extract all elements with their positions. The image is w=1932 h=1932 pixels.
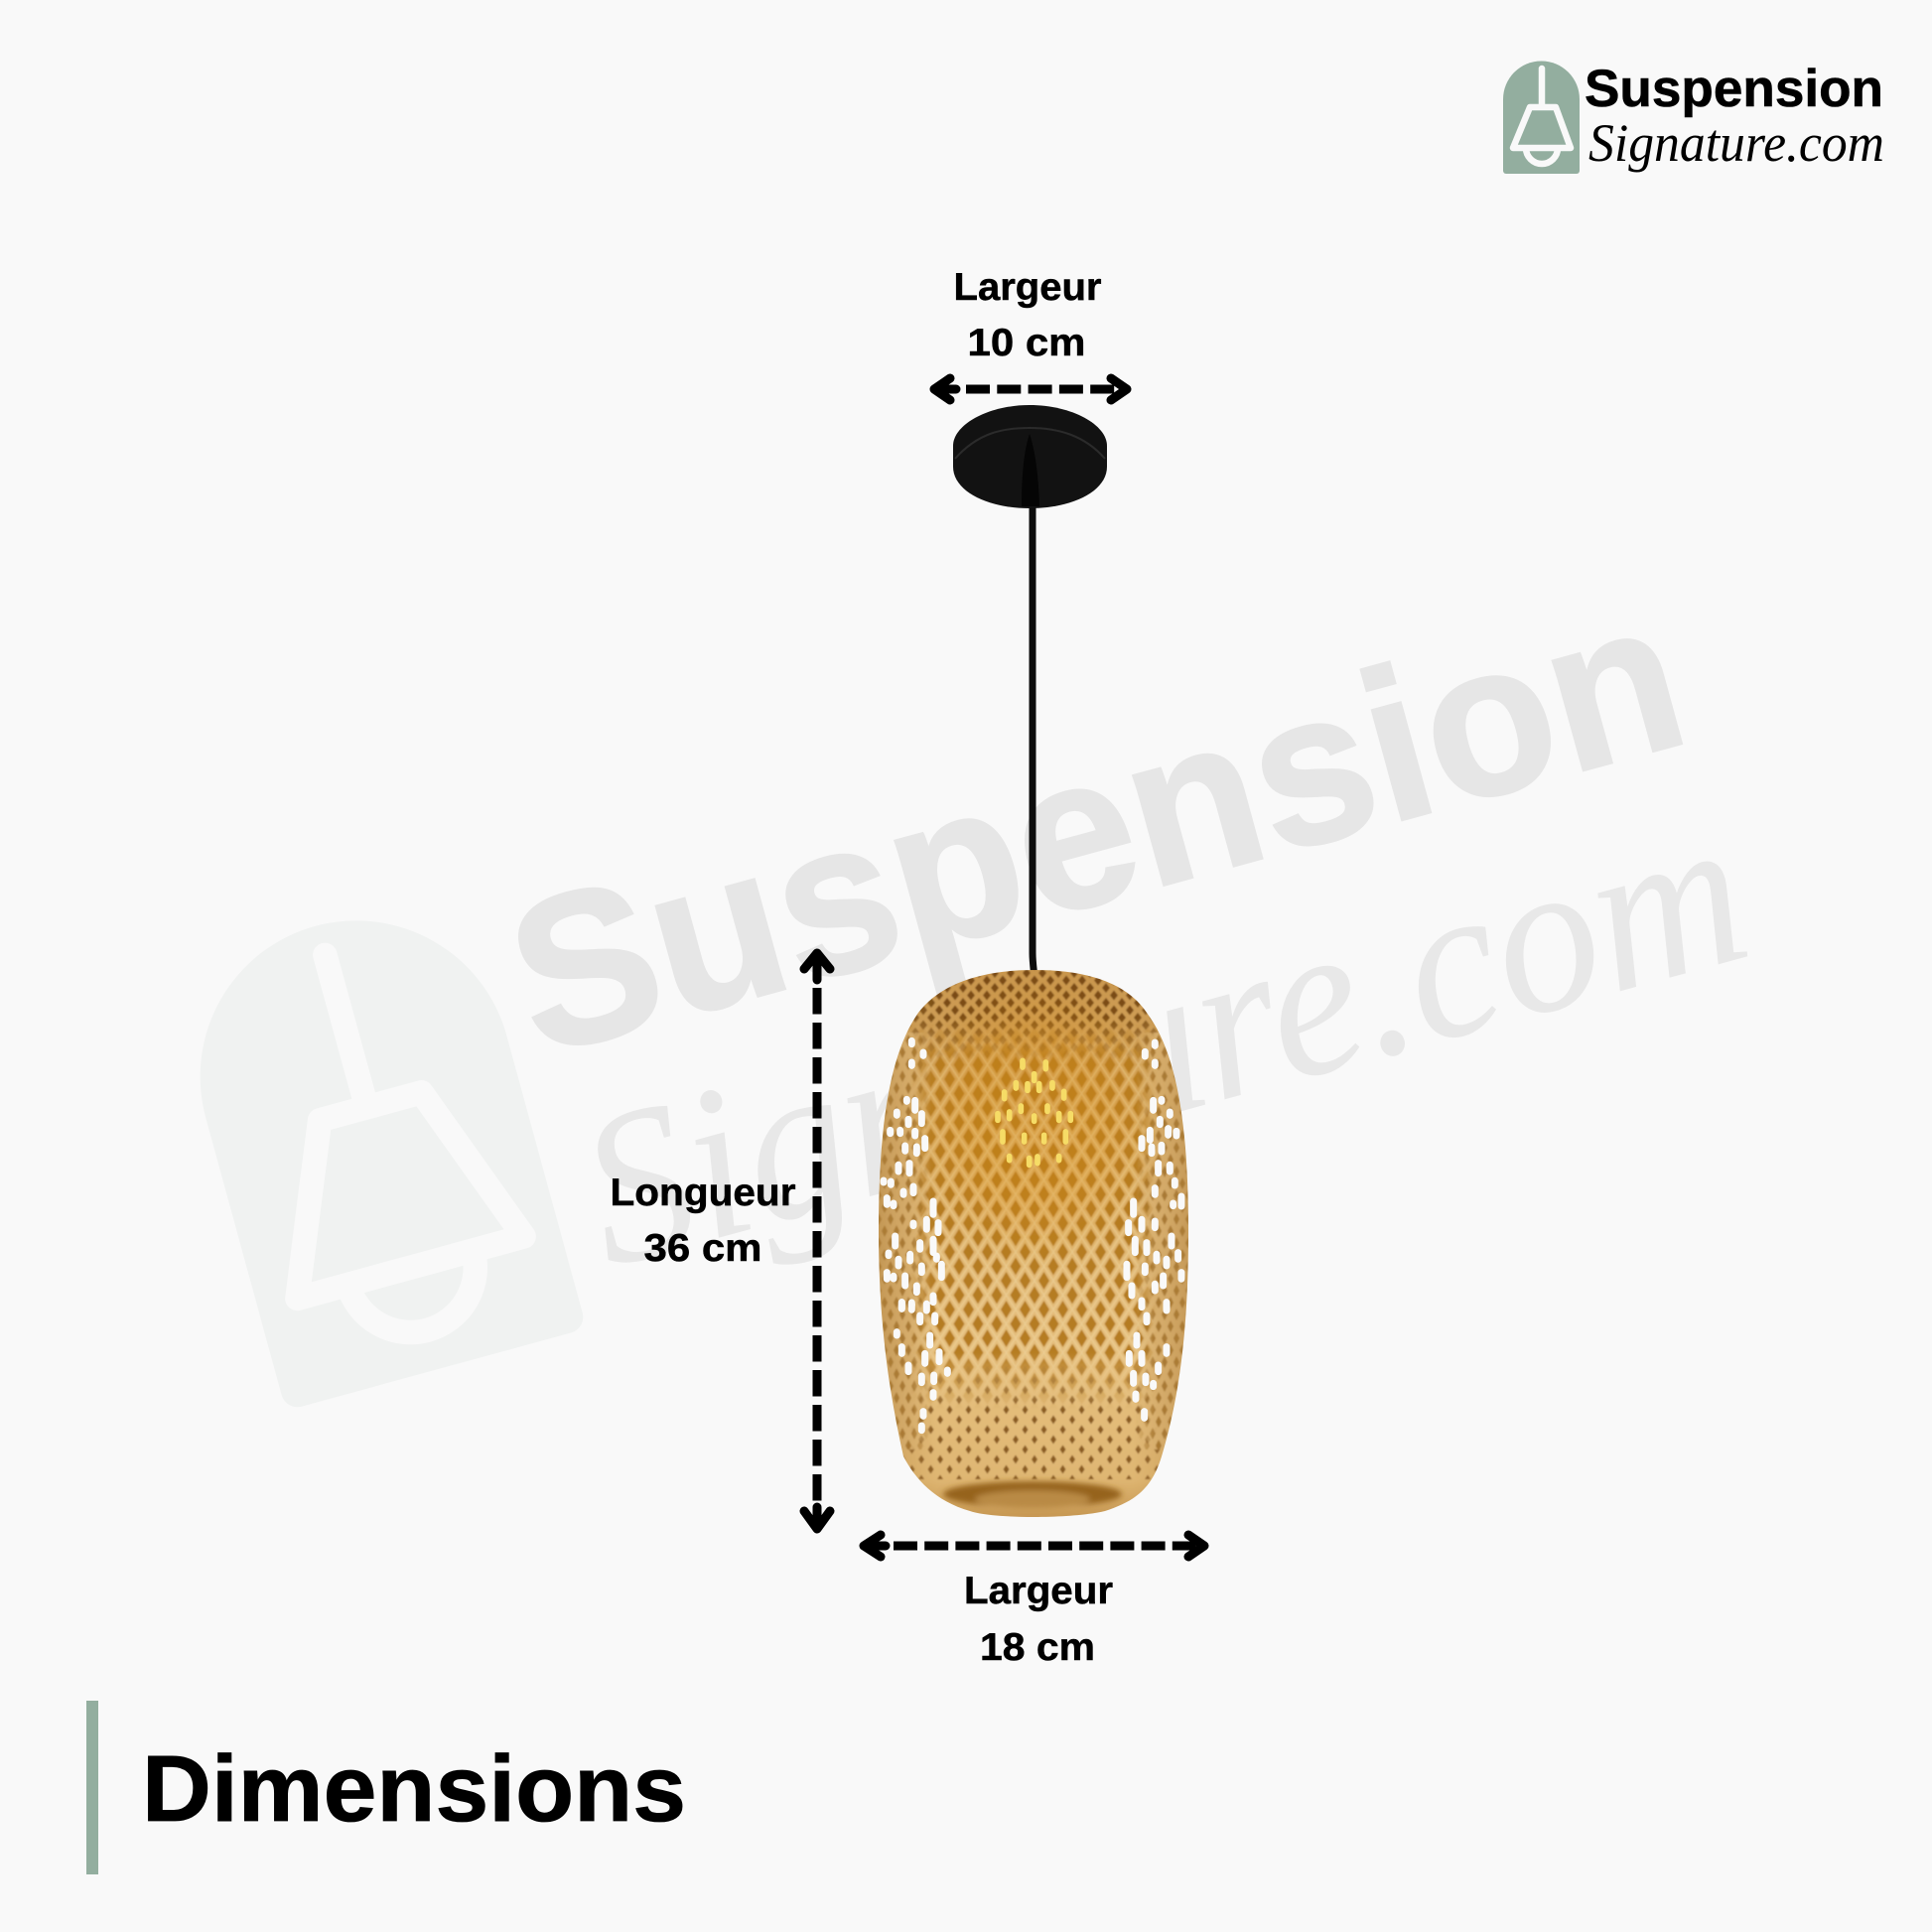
logo text: Signature.com: Signature.com xyxy=(1588,113,1884,173)
text: Largeur: Largeur xyxy=(953,266,1102,309)
watermark text: Suspension: Suspension xyxy=(486,552,1706,1100)
arrow: shade height xyxy=(804,953,830,1529)
text: Longueur: Longueur xyxy=(610,1172,796,1214)
text: 18 cm: 18 cm xyxy=(980,1626,1095,1669)
logo icon: lamp badge xyxy=(1503,62,1580,174)
label: top width xyxy=(953,266,1102,364)
bottom opening rim xyxy=(943,1481,1122,1508)
watermark text: Signature.com: Signature.com xyxy=(557,766,1769,1314)
bamboo woven shade xyxy=(874,963,1196,1524)
logo text: Suspension: Suspension xyxy=(1585,60,1883,118)
text: 10 cm: 10 cm xyxy=(967,322,1086,364)
arrow: shade width xyxy=(864,1535,1204,1557)
watermark icon: lamp badge xyxy=(165,885,587,1411)
logo xyxy=(1503,60,1884,174)
label: shade height xyxy=(610,1172,796,1270)
watermark: rotated brand logo xyxy=(162,551,1770,1411)
open gaps on the left and right sides xyxy=(884,1040,1181,1311)
accent bar xyxy=(86,1701,98,1874)
text: Largeur: Largeur xyxy=(964,1570,1113,1612)
ceiling canopy xyxy=(953,405,1107,508)
warm amber glow xyxy=(935,1008,1134,1236)
lamp cord xyxy=(1033,496,1035,978)
label: shade width xyxy=(964,1570,1113,1669)
title: Dimensions xyxy=(142,1736,686,1842)
pendant lamp xyxy=(874,405,1196,1524)
text: 36 cm: 36 cm xyxy=(643,1227,762,1270)
arrow: top width xyxy=(934,378,1127,400)
glowing bulb behind the weave xyxy=(998,1060,1070,1165)
